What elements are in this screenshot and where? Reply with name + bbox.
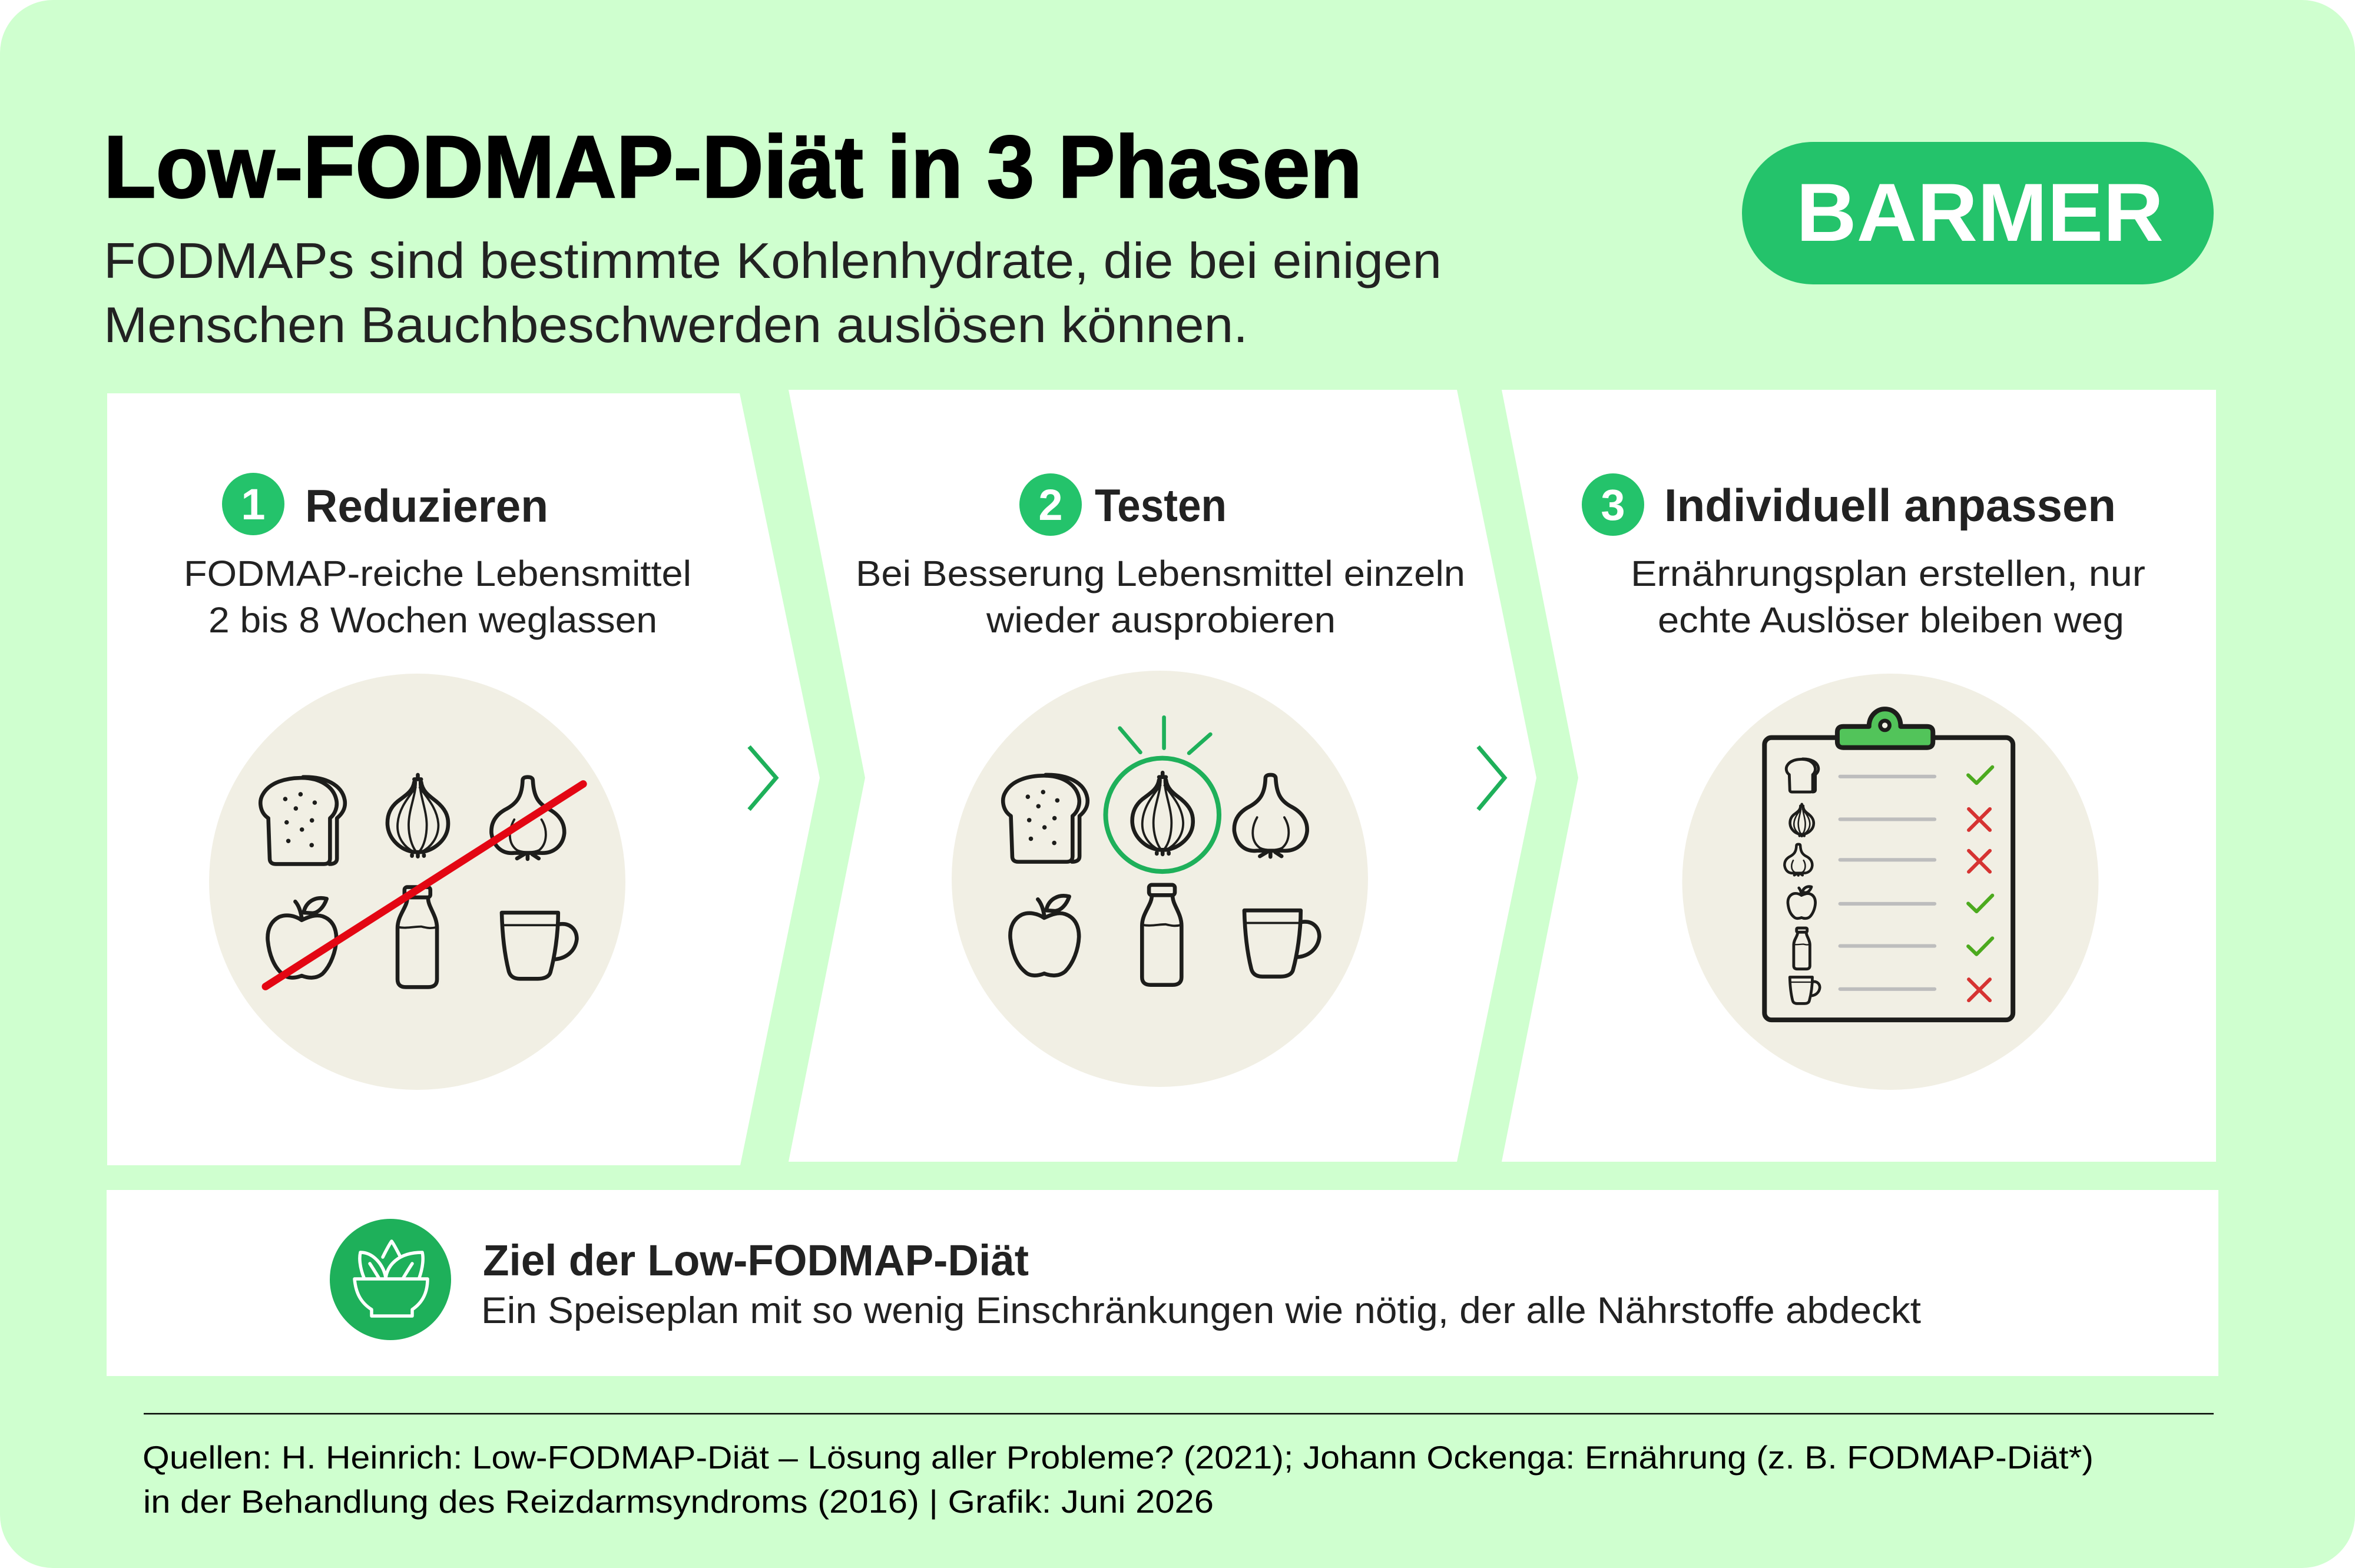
icon: milk bottle — [398, 887, 437, 987]
row: bread allowed — [1786, 759, 1992, 792]
row: mug excluded — [1790, 977, 1990, 1003]
goal description: Ein Speiseplan mit so wenig Einschränkungen wie nötig, der alle Nährstoffe abdeckt — [481, 1290, 1922, 1331]
icon: apple — [1010, 896, 1079, 976]
icon: highlighted onion — [1105, 717, 1219, 871]
row: garlic excluded — [1784, 844, 1990, 876]
description step 3: echte Auslöser bleiben weg — [1658, 600, 2124, 640]
number badge 2 — [1019, 473, 1082, 536]
icon: mug — [1244, 910, 1319, 977]
description step 2: Bei Besserung Lebensmittel einzeln — [856, 553, 1465, 594]
icon: garlic — [491, 777, 564, 859]
sources footer — [143, 1439, 2094, 1520]
icon: bread — [1003, 775, 1088, 862]
heading: Reduzieren: Reduzieren — [305, 480, 548, 532]
clipboard board — [1764, 738, 2013, 1020]
logo: BARMER — [1742, 142, 2214, 284]
illustration: clipboard checklist — [1682, 674, 2099, 1090]
heading: goal: Ziel der Low-FODMAP-Diät — [483, 1236, 1029, 1285]
number badge 1: 1 — [241, 480, 266, 529]
description step 3 — [1631, 553, 2145, 640]
number badge 3: 3 — [1601, 480, 1625, 529]
sources footer: in der Behandlung des Reizdarmsyndroms (2016) | Grafik: Juni 2026 — [143, 1483, 1214, 1520]
subtitle: FODMAPs sind bestimmte Kohlenhydrate, die bei einigen — [104, 233, 1442, 289]
heading: Individuell anpassen: Individuell anpassen — [1664, 479, 2116, 531]
icon: milk bottle — [1142, 885, 1181, 985]
icon: salad bowl — [330, 1219, 451, 1340]
panel: goal — [107, 1190, 2218, 1376]
clipboard clip — [1837, 709, 1933, 748]
number badge 3 — [1582, 473, 1644, 536]
sources footer: Quellen: H. Heinrich: Low-FODMAP-Diät – Lösung aller Probleme? (2021); Johann Ockenga: Ernährung (z. B. FODMAP-Diät*) — [143, 1439, 2094, 1476]
row: apple allowed — [1788, 887, 1992, 919]
number badge 1 — [222, 473, 284, 535]
icon: bread — [260, 777, 345, 864]
description step 2 — [856, 553, 1465, 640]
icon: onion — [387, 775, 448, 857]
arrow: chevron 1 — [749, 747, 776, 810]
illustration: crossed-out foods — [209, 674, 625, 1090]
logo: BARMER: BARMER — [1796, 166, 2164, 258]
description step 1: 2 bis 8 Wochen weglassen — [208, 600, 657, 640]
panel: step 1 Reduzieren — [107, 393, 820, 1165]
heading: Testen: Testen — [1095, 479, 1227, 531]
arrow: chevron 2 — [1478, 747, 1505, 810]
description step 3: Ernährungsplan erstellen, nur — [1631, 553, 2145, 594]
red strike-through line — [266, 784, 583, 987]
subtitle — [104, 233, 1442, 353]
row: onion excluded — [1790, 804, 1990, 836]
illustration: testing foods one by one — [952, 671, 1368, 1087]
description step 1: FODMAP-reiche Lebensmittel — [184, 553, 691, 594]
row: milk allowed — [1794, 928, 1992, 969]
panel: step 2 Testen — [789, 390, 1536, 1162]
panel: step 3 Individuell anpassen — [1502, 390, 2216, 1162]
number badge 2: 2 — [1038, 480, 1063, 529]
icon: garlic — [1234, 775, 1307, 857]
title: Low-FODMAP-Diät in 3 Phasen — [104, 117, 1362, 216]
icon: mug — [502, 913, 577, 979]
subtitle: Menschen Bauchbeschwerden auslösen können. — [104, 297, 1248, 353]
description step 2: wieder ausprobieren — [986, 600, 1336, 640]
icon: apple — [267, 898, 336, 977]
description step 1 — [184, 553, 691, 640]
